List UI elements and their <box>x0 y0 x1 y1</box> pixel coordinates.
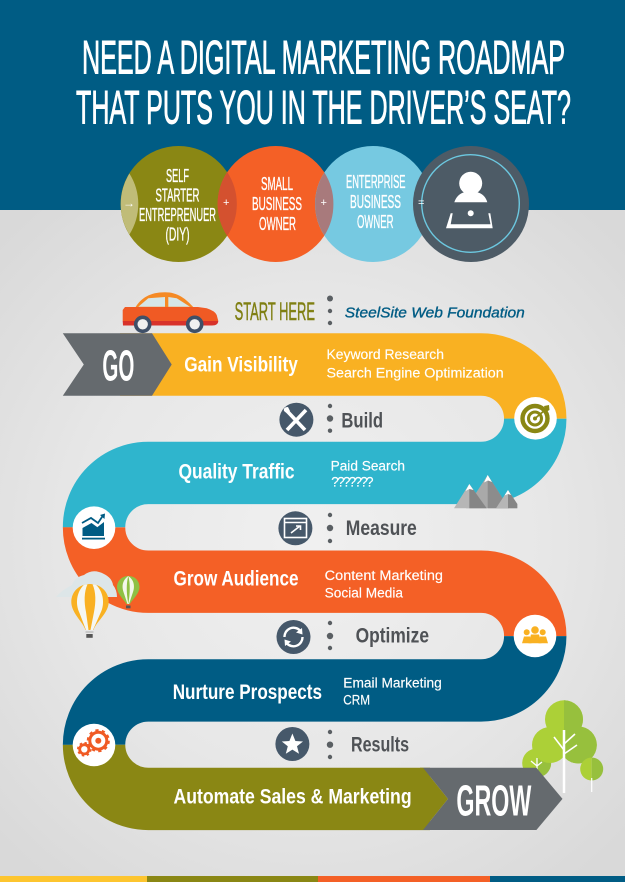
icon: orange balloon <box>71 584 109 638</box>
step: nurture prospects: CRM <box>343 692 370 707</box>
circle: self starter <box>121 146 237 262</box>
GO arrow: GO <box>102 342 134 391</box>
road: orange segment <box>94 527 535 636</box>
start here row: SteelSite Web Foundation <box>345 305 525 322</box>
GROW arrow <box>423 768 562 830</box>
step: grow audience <box>174 568 443 601</box>
step: grow audience: Content Marketing <box>325 568 443 583</box>
step: gain visibility <box>184 347 504 381</box>
title <box>76 30 571 134</box>
GO arrow <box>63 333 172 396</box>
step: quality traffic: ??????? <box>331 475 374 490</box>
header band <box>0 0 625 210</box>
tree: large <box>532 700 597 793</box>
circle: self starter: ENTREPRENUER <box>139 204 216 225</box>
step: quality traffic <box>178 459 405 490</box>
badge: target <box>514 397 557 440</box>
circle: small business owner <box>218 146 334 262</box>
circle: self starter: → <box>123 196 135 210</box>
step: gain visibility: Gain Visibility <box>184 354 298 377</box>
step: measure <box>278 511 417 545</box>
road: navy segment <box>94 636 535 745</box>
icon: green balloon <box>117 576 140 608</box>
circle: you at laptop <box>413 146 529 262</box>
road: yellow segment <box>120 364 535 419</box>
step: nurture prospects <box>173 675 442 707</box>
start here row: START HERE <box>235 299 315 326</box>
road: olive arrow tip <box>420 768 448 830</box>
badge: chart <box>73 506 115 549</box>
badge: people <box>514 615 556 657</box>
circle: self starter: SELF <box>166 165 189 186</box>
step: results: Results <box>351 733 409 756</box>
badge: gears <box>73 724 115 766</box>
footer colour bar <box>0 876 625 882</box>
circle: enterprise business owner: BUSINESS <box>350 191 401 212</box>
step: quality traffic: Paid Search <box>331 459 405 474</box>
start here row <box>235 296 525 326</box>
circle: small business owner: SMALL <box>261 173 293 194</box>
icon: mountains <box>454 475 517 508</box>
step: measure: Measure <box>346 517 417 540</box>
icon: cloud and balloons <box>56 571 140 638</box>
circle: small business owner: OWNER <box>259 213 296 234</box>
step: build: Build <box>341 409 383 432</box>
background <box>0 210 625 882</box>
winding road <box>94 364 535 799</box>
step: gain visibility: Search Engine Optimization <box>326 366 504 381</box>
step: results <box>275 727 409 761</box>
audience circles <box>121 146 529 262</box>
circle: enterprise business owner: ENTERPRISE <box>346 171 406 192</box>
step: optimize: Optimize <box>356 624 429 647</box>
circle: self starter: STARTER <box>156 185 200 206</box>
road: olive segment <box>94 745 430 799</box>
icon: trees <box>532 700 603 793</box>
circle: enterprise business owner <box>315 146 431 262</box>
circle: self starter: (DIY) <box>166 224 190 244</box>
step: grow audience: Social Media <box>325 586 403 601</box>
small tree behind arrow <box>522 748 551 778</box>
step: quality traffic: Quality Traffic <box>178 460 295 483</box>
step: nurture prospects: Email Marketing <box>343 675 442 690</box>
step: optimize <box>276 620 429 654</box>
circle: enterprise business owner: OWNER <box>357 211 394 232</box>
circle: small business owner: + <box>223 197 229 209</box>
step: gain visibility: Keyword Research <box>326 347 444 362</box>
GROW arrow: GROW <box>456 777 532 826</box>
step: grow audience: Grow Audience <box>174 568 298 591</box>
circle: enterprise business owner: + <box>320 197 327 209</box>
icon: car <box>123 292 218 333</box>
step: automate sales and marketing: Automate Sales & Marketing <box>174 785 412 808</box>
road: teal segment <box>94 419 535 527</box>
circle: small business owner: BUSINESS <box>252 193 302 214</box>
circle: you at laptop: = <box>418 197 424 209</box>
tree: small right <box>580 758 603 792</box>
step: nurture prospects: Nurture Prospects <box>173 681 322 704</box>
step: build <box>279 403 383 437</box>
